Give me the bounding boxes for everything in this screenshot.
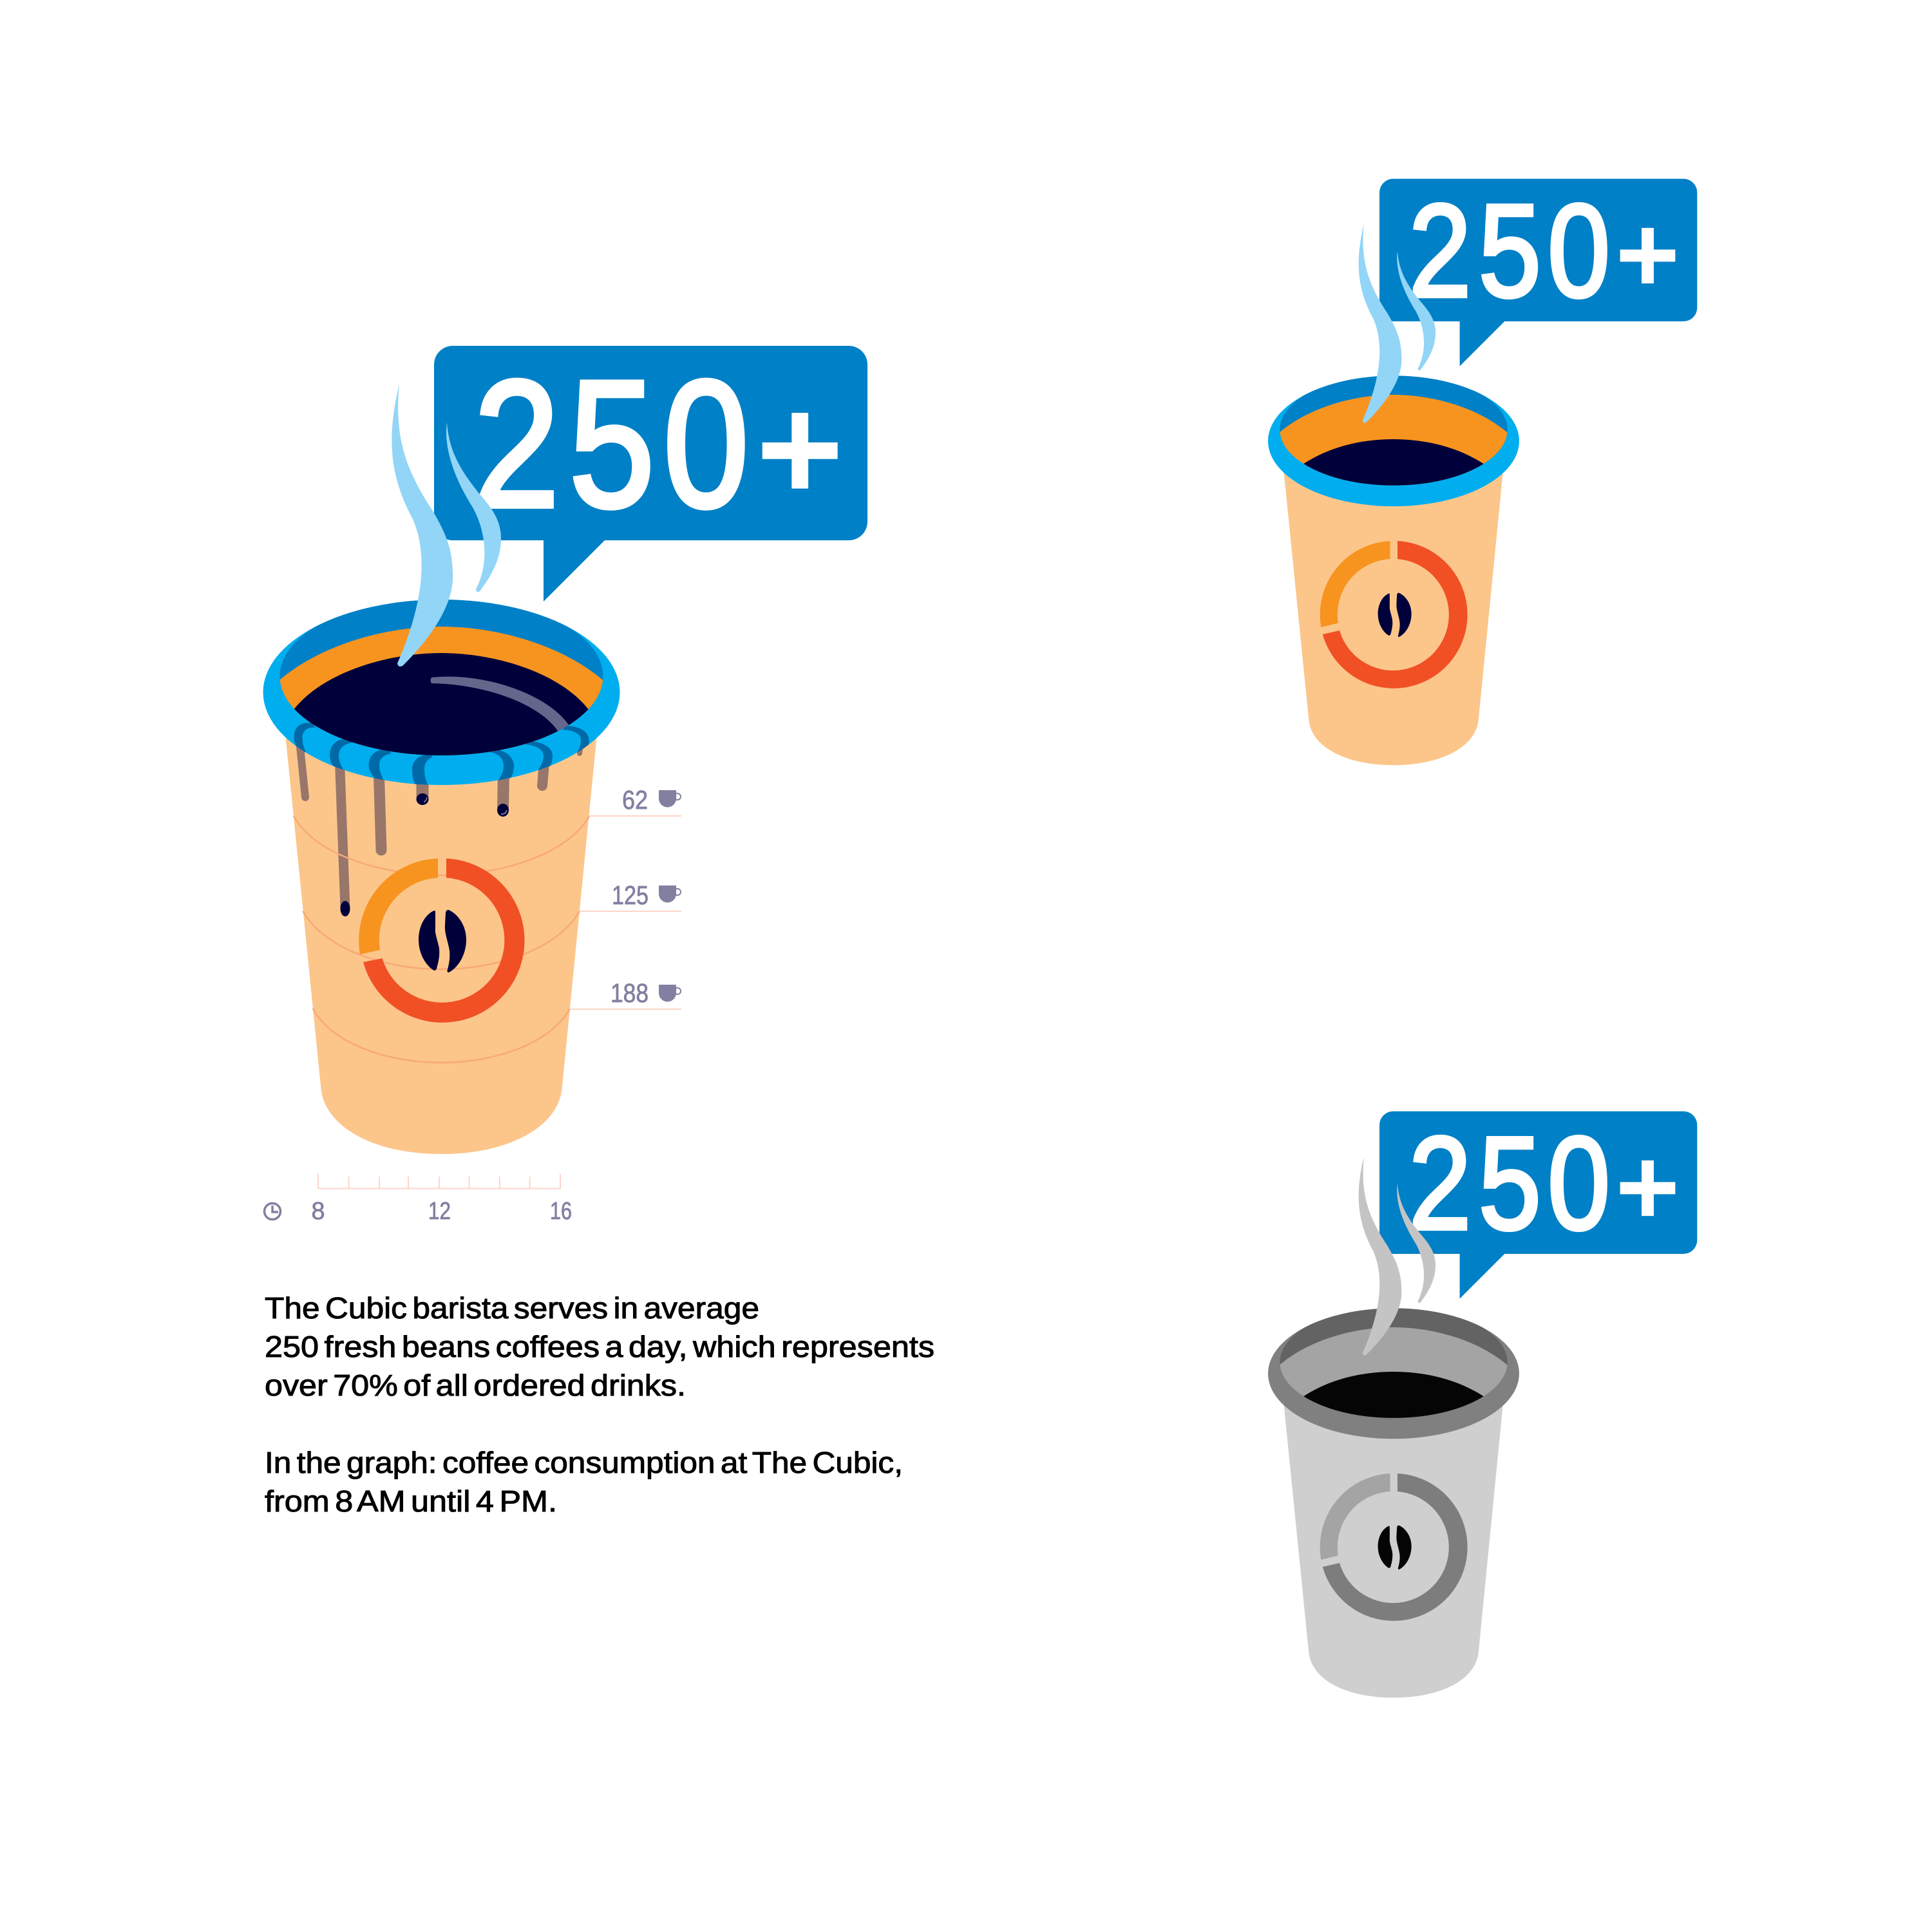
cup — [1268, 1307, 1519, 1698]
steam — [1359, 1157, 1435, 1356]
speech bubble: 250+: + — [1617, 197, 1678, 313]
small colour cup graphic — [1268, 178, 1697, 765]
logo ring — [359, 858, 524, 1023]
time axis — [264, 1174, 572, 1225]
level label: 188 cups — [570, 978, 681, 1009]
level label: 62 cups — [589, 785, 681, 816]
description text: over 70% of all ordered drinks. — [265, 1368, 686, 1402]
cup body — [285, 728, 598, 1154]
cup inner wall — [279, 627, 603, 755]
coffee highlight — [430, 677, 569, 733]
speech bubble: 250+: 250 — [1409, 178, 1610, 325]
consumption level lines on cup — [294, 816, 589, 1063]
speech bubble: 250+: 250 — [474, 344, 749, 545]
logo ring — [1320, 541, 1468, 688]
steam — [392, 384, 501, 667]
time axis: 12 — [428, 1198, 451, 1225]
time axis: 8 — [312, 1198, 325, 1225]
level label: 125 cups: 125 — [612, 880, 649, 910]
steam — [1359, 224, 1435, 423]
description text: The Cubic barista serves in average — [265, 1291, 759, 1325]
rim drip marks — [294, 723, 589, 787]
speech bubble: 250+: + — [1617, 1130, 1678, 1245]
icon: coffee bean — [1378, 593, 1412, 637]
description text: from 8 AM until 4 PM. — [265, 1484, 557, 1518]
speech bubble: 250+ — [434, 344, 867, 601]
level label: 62 cups: 62 — [622, 785, 648, 815]
level label: 125 cups — [580, 880, 681, 911]
icon: clock — [264, 1203, 281, 1220]
icon: coffee bean — [1378, 1526, 1412, 1569]
coffee drips — [299, 741, 582, 916]
level label: 188 cups: 188 — [611, 978, 649, 1008]
description text — [265, 1291, 934, 1518]
logo ring — [1320, 1473, 1468, 1621]
description text: In the graph: coffee consumption at The Cubic, — [265, 1446, 903, 1479]
cup rim — [263, 597, 620, 787]
time axis: 16 — [550, 1198, 572, 1225]
cup — [1268, 374, 1519, 765]
small greyscale cup graphic — [1268, 1110, 1697, 1698]
description text: 250 fresh beans coffees a day, which represents — [265, 1330, 934, 1363]
coffee surface — [294, 653, 589, 755]
speech bubble: 250+ — [1379, 1110, 1697, 1299]
speech bubble: 250+ — [1379, 178, 1697, 366]
main coffee cup graphic — [263, 344, 867, 1225]
speech bubble: 250+: 250 — [1409, 1110, 1610, 1257]
icon: coffee bean — [419, 910, 466, 972]
speech bubble: 250+: + — [759, 370, 841, 528]
